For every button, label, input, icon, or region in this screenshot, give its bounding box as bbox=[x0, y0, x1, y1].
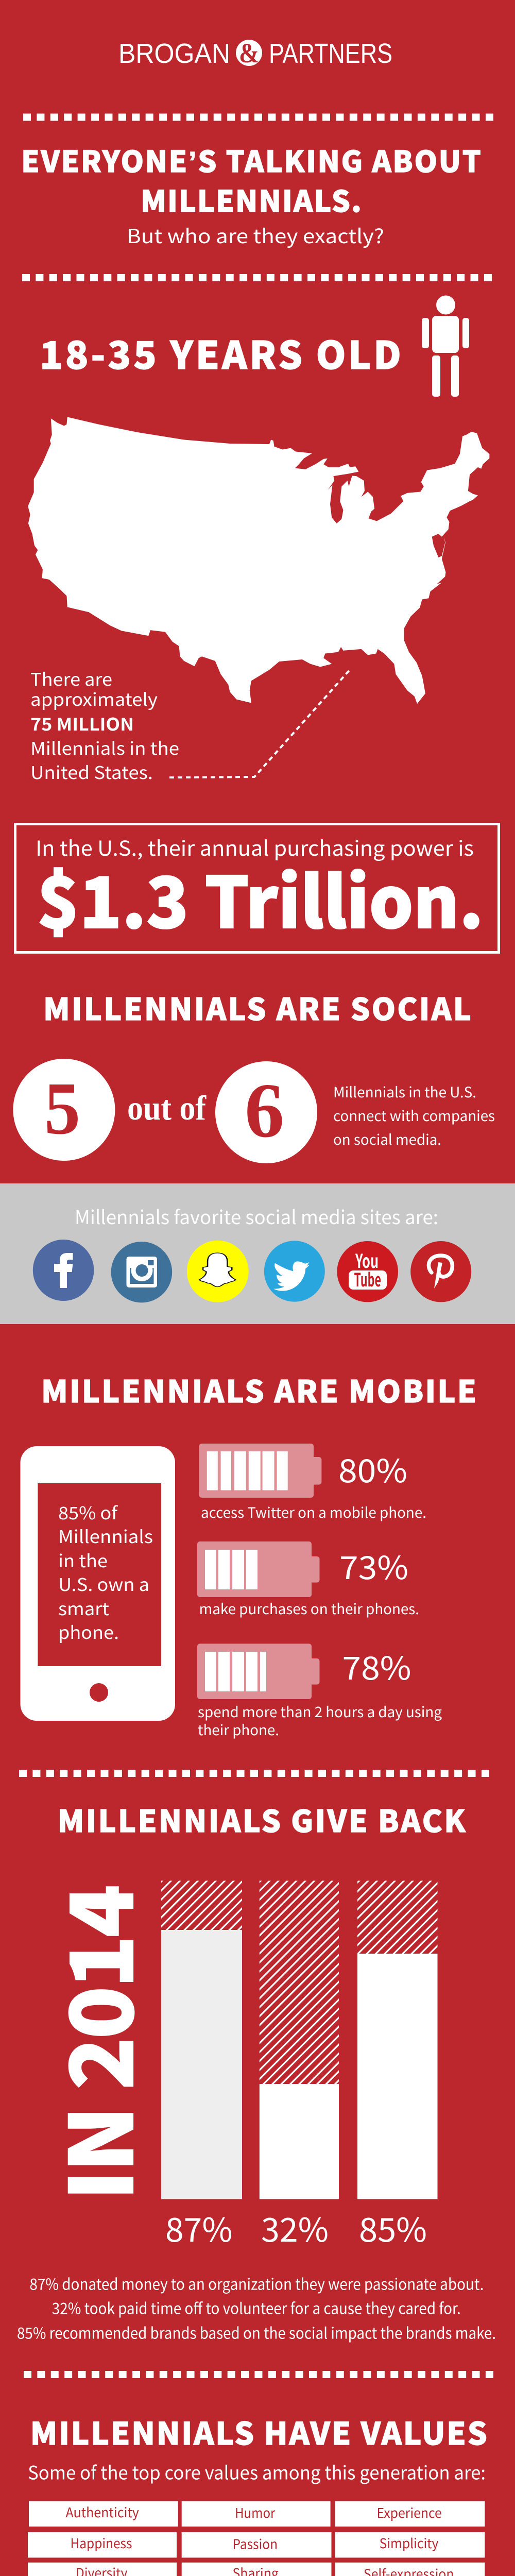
panel: favorite social media sites bbox=[0, 1183, 515, 1324]
text block: connect on social media bbox=[333, 1081, 495, 1149]
panel: purchasing power: $1.3 Trillion. bbox=[37, 846, 484, 948]
text block: 75 million Millennials: Millennials in the bbox=[30, 735, 179, 760]
label: in 2014: IN 2014 bbox=[33, 1885, 158, 2200]
text block: 85% own a smart phone: U.S. own a bbox=[58, 1571, 149, 1596]
cell: Humor bbox=[182, 2501, 331, 2527]
bar: 32%: 32% bbox=[261, 2204, 329, 2251]
title: EVERYONE’S TALKING ABOUT bbox=[21, 139, 481, 181]
bar: 85% bbox=[357, 1880, 438, 2251]
text block: 75 million Millennials: United States. bbox=[30, 759, 153, 784]
cell: Simplicity: Simplicity bbox=[380, 2533, 439, 2552]
stat: 5 out of 6: 6 bbox=[245, 1067, 284, 1154]
cell: Experience bbox=[335, 2501, 485, 2527]
stat: 5 out of 6: out of bbox=[127, 1088, 207, 1127]
stat: battery 78%: their phone. bbox=[198, 1719, 279, 1740]
logo: Brogan & Partners: & bbox=[239, 38, 259, 69]
heading: favorite sites: Millennials favorite social media sites are: bbox=[75, 1202, 438, 1230]
stat: battery 78% bbox=[197, 1642, 442, 1740]
cell: Authenticity: Authenticity bbox=[66, 2502, 139, 2521]
table: core values bbox=[28, 2501, 485, 2576]
cell: Self-expression bbox=[335, 2563, 485, 2576]
text block: connect on social media: connect with companies bbox=[333, 1105, 495, 1126]
stat: battery 73% bbox=[197, 1541, 419, 1619]
map: contiguous United States bbox=[28, 417, 489, 704]
heading: give back: MILLENNIALS GIVE BACK bbox=[58, 1797, 466, 1841]
text block: 85% own a smart phone bbox=[58, 1499, 153, 1644]
icon: YouTube: Tube bbox=[354, 1265, 381, 1292]
heading: mobile: MILLENNIALS ARE MOBILE bbox=[41, 1367, 476, 1411]
text block: giving stats bbox=[17, 2272, 496, 2343]
title: MILLENNIALS. bbox=[141, 178, 362, 221]
icon: Pinterest bbox=[410, 1241, 471, 1302]
arrow: dotted leader to map bbox=[169, 669, 351, 777]
bar: 32% bbox=[260, 1880, 339, 2251]
stat: battery 78%: spend more than 2 hours a day using bbox=[198, 1701, 442, 1722]
text block: giving stats: 32% took paid time off to volunteer for a cause they cared for. bbox=[52, 2296, 461, 2318]
cell: Sharing bbox=[182, 2563, 332, 2576]
heading: values: MILLENNIALS HAVE VALUES bbox=[30, 2409, 487, 2454]
stat: 5 out of 6 bbox=[13, 1059, 317, 1163]
stat: battery 73%: make purchases on their phones. bbox=[199, 1598, 419, 1619]
cell: Happiness bbox=[28, 2532, 177, 2557]
text block: 75 million Millennials: approximately bbox=[30, 686, 158, 711]
icon: Facebook bbox=[33, 1240, 94, 1301]
text block: 75 million Millennials bbox=[30, 666, 179, 784]
bar: 85%: 85% bbox=[359, 2204, 427, 2251]
text block: connect on social media: on social media. bbox=[333, 1129, 441, 1149]
stat: battery 80%: access Twitter on a mobile phone. bbox=[201, 1502, 426, 1522]
cell: Experience: Experience bbox=[377, 2503, 442, 2522]
cell: Authenticity bbox=[29, 2501, 178, 2527]
cell: Happiness: Happiness bbox=[70, 2533, 132, 2552]
text block: 85% own a smart phone: in the bbox=[58, 1547, 108, 1572]
icon: YouTube: You bbox=[355, 1246, 379, 1274]
logo: Brogan & Partners: PARTNERS bbox=[269, 38, 392, 69]
logo: Brogan & Partners bbox=[118, 38, 392, 69]
cell: Passion bbox=[182, 2532, 332, 2557]
icon: smartphone bbox=[21, 1446, 175, 1721]
heading: age range: 18-35 YEARS OLD bbox=[40, 325, 401, 380]
stat: battery 78%: 78% bbox=[342, 1642, 411, 1689]
subtitle: But who are they exactly? bbox=[127, 221, 384, 249]
icon: YouTube bbox=[337, 1241, 398, 1302]
text block: 85% own a smart phone: phone. bbox=[58, 1619, 119, 1644]
text block: 85% own a smart phone: smart bbox=[58, 1595, 109, 1620]
bar: 87%: 87% bbox=[165, 2204, 233, 2251]
subheading: core values: Some of the top core values among this generation are: bbox=[28, 2458, 486, 2485]
icon: Twitter bbox=[264, 1241, 325, 1302]
text block: 85% own a smart phone: Millennials bbox=[58, 1523, 153, 1548]
stat: battery 73%: 73% bbox=[339, 1542, 408, 1588]
cell: Passion: Passion bbox=[233, 2534, 278, 2553]
text block: connect on social media: Millennials in the U.S. bbox=[333, 1081, 476, 1102]
logo: Brogan & Partners: BROGAN bbox=[118, 38, 230, 69]
text block: 75 million Millennials: There are bbox=[30, 666, 112, 691]
stat: battery 80% bbox=[199, 1444, 426, 1522]
icon: Instagram bbox=[111, 1242, 172, 1302]
text block: 75 million Millennials: 75 MILLION bbox=[30, 710, 134, 736]
bar chart: giving back bbox=[161, 1880, 438, 2251]
text block: giving stats: 87% donated money to an organization they were passionate about. bbox=[29, 2272, 484, 2295]
icon: Snapchat bbox=[187, 1241, 249, 1302]
title bbox=[21, 139, 481, 221]
cell: Humor: Humor bbox=[235, 2503, 276, 2522]
bar: 87% bbox=[161, 1880, 242, 2251]
stat: 5 out of 6: 5 bbox=[44, 1067, 80, 1150]
icon: person bbox=[422, 296, 469, 397]
text block: 85% own a smart phone: 85% of bbox=[58, 1499, 118, 1524]
heading: social: MILLENNIALS ARE SOCIAL bbox=[43, 985, 471, 1029]
panel: purchasing power: In the U.S., their annual purchasing power is bbox=[36, 832, 474, 862]
cell: Simplicity bbox=[335, 2532, 485, 2557]
stat: battery 80%: 80% bbox=[338, 1445, 407, 1492]
cell: Diversity bbox=[28, 2563, 177, 2576]
